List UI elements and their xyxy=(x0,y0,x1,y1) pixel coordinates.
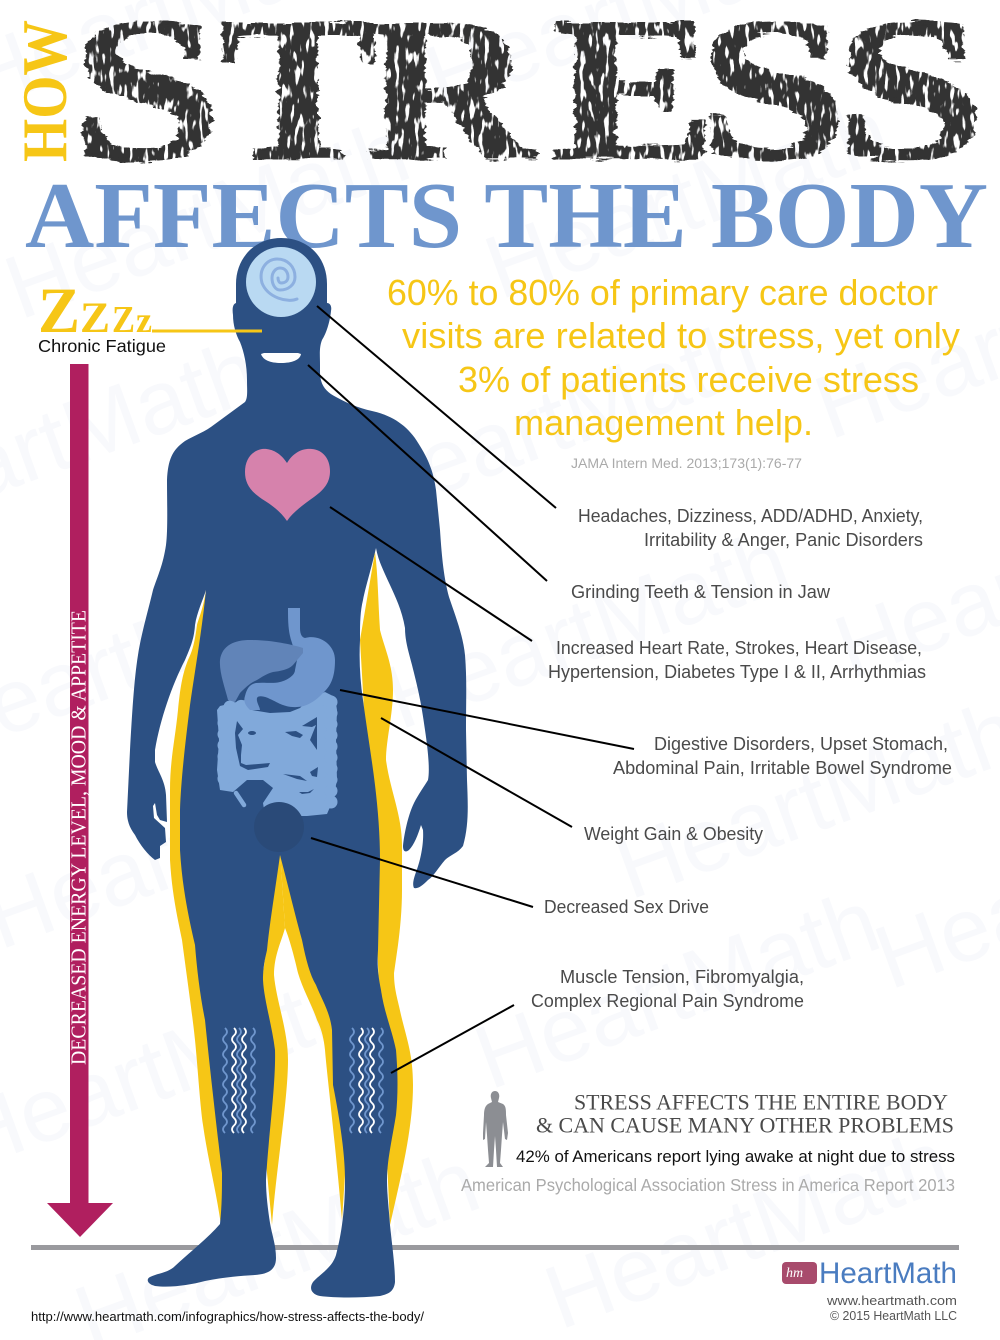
label: heart: Hypertension, Diabetes Type I & II, Arrhythmias xyxy=(548,662,926,682)
icon: zzzz sleep letters with leader xyxy=(38,275,262,347)
icon: zzzz sleep letters with leader: Z xyxy=(112,299,135,341)
label: muscle xyxy=(531,967,804,1011)
icon: zzzz sleep letters with leader: Z xyxy=(80,295,110,342)
label: heart xyxy=(548,638,926,682)
source: american psychological association: American Psychological Association Stress in America Report 2013 xyxy=(461,1175,955,1195)
logo: heartmath: HeartMath xyxy=(819,1257,957,1290)
infographic: how stress affects the body: HeartMath xyxy=(0,101,422,339)
label: muscle: Complex Regional Pain Syndrome xyxy=(531,991,804,1011)
label: digestive: Abdominal Pain, Irritable Bowel Syndrome xyxy=(613,758,952,778)
label: muscle: Muscle Tension, Fibromyalgia, xyxy=(560,967,804,987)
label: chronic fatigue: Chronic Fatigue xyxy=(38,336,166,356)
label: sex drive: Decreased Sex Drive xyxy=(544,897,709,917)
icon: muscle tension waves left leg xyxy=(223,1028,255,1133)
label: head symptoms: Headaches, Dizziness, ADD/ADHD, Anxiety, xyxy=(578,506,923,526)
floor line xyxy=(31,1245,959,1250)
label: jaw: Grinding Teeth & Tension in Jaw xyxy=(571,582,831,602)
icon: heart xyxy=(245,449,330,521)
callout: primary care statistic: 60% to 80% of primary care doctor xyxy=(387,272,938,313)
heading: stress affects the entire body: & CAN CAUSE MANY OTHER PROBLEMS xyxy=(536,1112,954,1138)
icon: digestive organs xyxy=(217,608,337,816)
heading: stress affects the entire body: STRESS AFFECTS THE ENTIRE BODY xyxy=(574,1090,948,1114)
icon: small human figure xyxy=(483,1091,508,1167)
infographic: how stress affects the body: HeartMath xyxy=(373,511,802,749)
icon: zzzz sleep letters with leader: Z xyxy=(38,275,80,347)
icon: reproductive organs circle xyxy=(254,802,304,852)
icon: jaw / teeth xyxy=(261,353,301,363)
arrow label: DECREASED ENERGY LEVEL, MOOD & APPETITE xyxy=(66,610,90,1065)
label: heart: Increased Heart Rate, Strokes, Heart Disease, xyxy=(556,638,922,658)
label: weight: Weight Gain & Obesity xyxy=(584,824,763,844)
heading: affects the body: AFFECTS THE BODY xyxy=(25,164,988,268)
arrow: decreased energy xyxy=(47,364,113,1237)
icon: brain with spiral xyxy=(246,247,316,317)
callout: primary care statistic: 3% of patients receive stress xyxy=(458,359,919,400)
leader lines xyxy=(308,306,634,1073)
yellow aura around body xyxy=(170,552,413,1225)
intestine gaps xyxy=(235,717,318,794)
label: head symptoms: Irritability & Anger, Panic Disorders xyxy=(644,530,923,550)
body silhouette xyxy=(127,238,468,1298)
callout: primary care statistic: management help. xyxy=(514,402,813,443)
label: digestive: Digestive Disorders, Upset Stomach, xyxy=(654,734,948,754)
logo: heartmath: hm xyxy=(786,1266,803,1281)
callout: primary care statistic: visits are related to stress, yet only xyxy=(402,315,960,356)
heading: how: HOW xyxy=(9,20,80,162)
infographic: how stress affects the body: HeartMath xyxy=(473,81,902,319)
heading: stress affects the entire body xyxy=(536,1090,954,1138)
infographic: how stress affects the body: HeartMath xyxy=(343,301,772,539)
statistic: lying awake: 42% of Americans report lying awake at night due to stress xyxy=(516,1148,955,1166)
copyright: © 2015 HeartMath LLC xyxy=(830,1309,957,1323)
label: head symptoms xyxy=(578,506,923,550)
source citation: JAMA Intern Med. 2013;173(1):76-77 xyxy=(571,456,802,471)
heading: stress xyxy=(71,0,986,203)
stomach xyxy=(244,608,335,710)
website: www.heartmath.com xyxy=(826,1293,957,1308)
callout: primary care statistic xyxy=(387,272,960,443)
icon: muscle tension waves right leg xyxy=(350,1028,383,1133)
infographic: how stress affects the body: HeartMath xyxy=(463,871,892,1109)
label: digestive xyxy=(613,734,952,778)
icon: zzzz sleep letters with leader: z xyxy=(136,300,152,340)
liver xyxy=(220,640,303,702)
source url: http://www.heartmath.com/infographics/how-stress-affects-the-body/ xyxy=(31,1310,425,1324)
large and small intestine xyxy=(217,692,337,816)
